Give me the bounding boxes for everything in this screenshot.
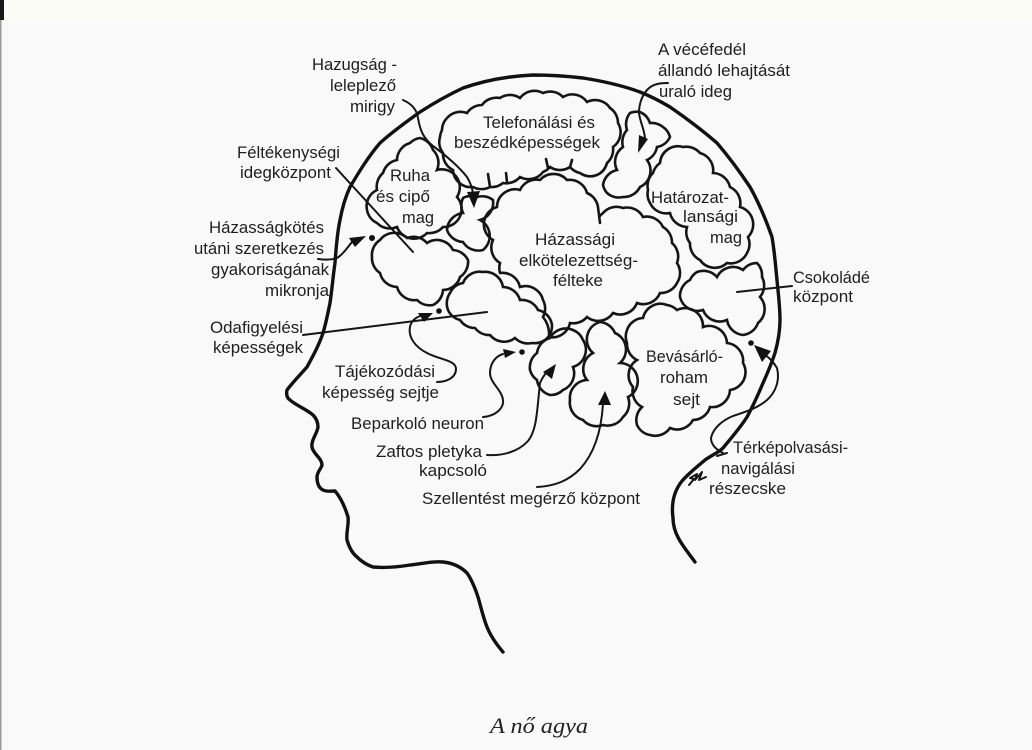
lobe: határozatlansági mag — [648, 146, 753, 268]
label: és cipő: és cipő — [376, 187, 430, 206]
label: a vécéfedél: A vécéfedél — [658, 40, 746, 59]
label: tájékozódási: Tájékozódási — [335, 362, 435, 381]
label: zaftos pletyka: Zaftos pletyka — [376, 442, 483, 461]
callout: csokoládé központ — [737, 268, 870, 306]
lobe: zaftos pletyka kapcsoló — [530, 329, 586, 395]
lobe: csokoládé központ — [680, 263, 765, 335]
lobe: odafigyelési képességek — [447, 272, 552, 343]
lobe: vécéfedél ideg — [603, 112, 670, 197]
lobe: ruha és cipő mag — [367, 138, 462, 239]
label: ruha: Ruha — [390, 166, 431, 185]
head outline — [287, 75, 780, 652]
label: szellentést megérző központ: Szellentést megérző központ — [422, 489, 640, 508]
callout: tájékozódási képesség sejtje — [322, 308, 456, 402]
lobe: telefonálási és beszédképességek — [439, 91, 621, 189]
lobe: féltékenységi idegközpont — [372, 233, 468, 305]
label: utáni szeretkezés: utáni szeretkezés — [194, 239, 324, 258]
lobe: bevásárlóroham sejt — [626, 304, 746, 436]
label: állandó lehajtását: állandó lehajtását — [658, 61, 790, 80]
label: féltékenységi: Féltékenységi — [237, 143, 340, 162]
lobe: hazugságleleplező mirigy — [447, 196, 493, 251]
label: beparkoló neuron: Beparkoló neuron — [351, 414, 484, 433]
label: központ: központ — [793, 287, 853, 306]
label: képességek: képességek — [213, 338, 303, 357]
label: telefonálási: Telefonálási és — [483, 113, 595, 132]
label: navigálási: navigálási — [721, 459, 795, 478]
label: házassági: Házassági — [535, 230, 615, 249]
callout: féltékenységi idegközpont — [237, 143, 413, 252]
callout: odafigyelési képességek — [210, 312, 487, 357]
label: mikronja: mikronja — [265, 281, 330, 300]
label: gyakoriságának: gyakoriságának — [211, 260, 329, 279]
label: házasságkötés: Házasságkötés — [209, 218, 324, 237]
label: térképolvasási: Térképolvasási- — [733, 438, 848, 457]
lobe: szellentést megérző központ — [570, 322, 638, 426]
label: idegközpont: idegközpont — [240, 163, 331, 182]
label: sejt: sejt — [673, 390, 700, 409]
callout: vécéfedél ideg — [638, 40, 790, 153]
label: lansági: lansági — [683, 207, 738, 226]
label: uraló ideg: uraló ideg — [659, 82, 732, 101]
callout: térképolvasási-navigálási részecske — [689, 340, 848, 498]
label: kapcsoló: kapcsoló — [419, 461, 487, 480]
label: elkötelezettség: elkötelezettség- — [519, 251, 638, 270]
label: roham: roham — [660, 368, 708, 387]
label: mirigy: mirigy — [350, 97, 395, 116]
label: részecske: részecske — [709, 479, 786, 498]
icon: bajusz — [689, 472, 706, 485]
label: határozat: Határozat- — [651, 188, 729, 207]
label: odafigyelési: Odafigyelési — [210, 318, 303, 337]
lobe: házassági elkötelezettség-félteke — [484, 174, 680, 337]
callout: házasságkötés utáni szeretkezés gyakoriságának mikronja — [194, 218, 375, 300]
title: A nő agya — [488, 713, 588, 738]
label: képesség sejtje: képesség sejtje — [322, 383, 439, 402]
callout: szellentést megérző központ — [422, 391, 640, 508]
label: csokoládé: Csokoládé — [793, 268, 870, 287]
label: mag: mag — [402, 208, 434, 227]
callout: hazugság leleplező mirigy — [312, 55, 480, 208]
label: hazugság: Hazugság - — [312, 55, 397, 74]
label: beszédképességek: beszédképességek — [454, 133, 601, 152]
label: leleplező: leleplező — [330, 76, 396, 95]
callout: zaftos pletyka kapcsoló — [376, 364, 556, 480]
label: bevásárló: Bevásárló- — [646, 347, 723, 366]
label: mag: mag — [710, 228, 742, 247]
callout: beparkoló neuron — [351, 349, 525, 433]
label: félteke: félteke — [553, 271, 603, 290]
